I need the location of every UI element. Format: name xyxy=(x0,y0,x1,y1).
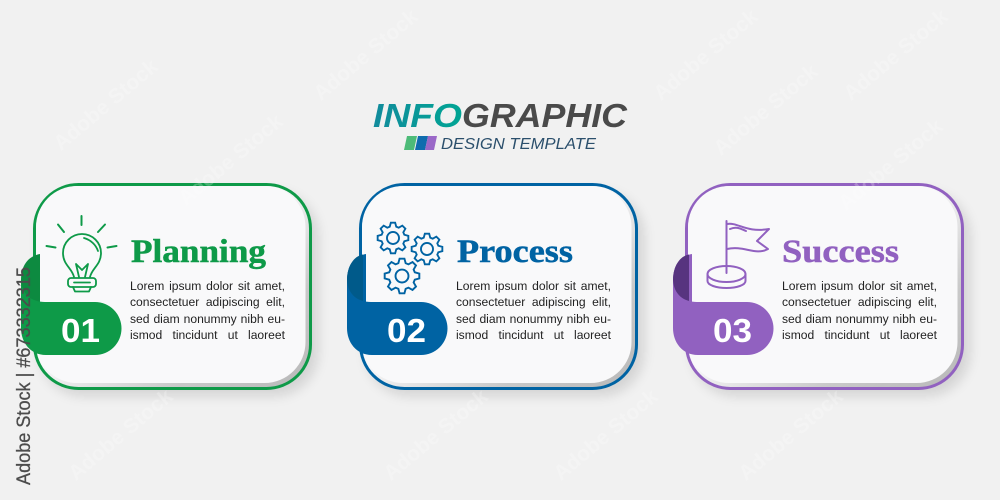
icon: three colored stripes xyxy=(404,136,437,150)
watermark pattern: Adobe Stock xyxy=(49,55,163,155)
watermark pattern: Adobe Stock xyxy=(839,5,953,105)
watermark pattern: Adobe Stock xyxy=(379,385,493,485)
heading: INFOGRAPHIC xyxy=(373,97,628,134)
icon: flag xyxy=(708,221,769,288)
watermark pattern: Adobe Stock xyxy=(734,385,848,485)
heading: INFOGRAPHIC: INFO xyxy=(373,97,462,134)
text: success description: consectetuer adipiscing elit, xyxy=(782,295,937,309)
text: success description: ismod tincidunt ut laoreet xyxy=(782,328,937,342)
watermark pattern: Adobe Stock xyxy=(64,385,178,485)
text: process description: sed diam nonummy nibh eu- xyxy=(456,312,611,326)
card frame xyxy=(360,184,644,396)
text: process description: Lorem ipsum dolor sit amet, xyxy=(456,279,611,293)
heading: success: Success xyxy=(782,234,899,270)
text: planning description: ismod tincidunt ut laoreet xyxy=(130,328,285,342)
text: planning description: sed diam nonummy nibh eu- xyxy=(130,312,285,326)
text: success description: Lorem ipsum dolor sit amet, xyxy=(782,279,937,293)
icon: light bulb xyxy=(46,216,116,292)
heading: INFOGRAPHIC: GRAPHIC xyxy=(462,97,628,134)
panel: success xyxy=(673,183,974,400)
text: planning description: consectetuer adipiscing elit, xyxy=(130,295,285,309)
number pill xyxy=(21,280,122,355)
number pill xyxy=(347,280,448,355)
text: success description xyxy=(782,279,937,342)
subheading: design template: DESIGN TEMPLATE xyxy=(441,136,597,153)
ribbon tab xyxy=(673,254,692,310)
number pill: 03 xyxy=(713,312,752,349)
icon: gears xyxy=(378,223,442,293)
watermark pattern: Adobe Stock xyxy=(174,110,288,210)
watermark pattern: Adobe Stock xyxy=(309,5,423,105)
heading: planning: Planning xyxy=(131,234,267,270)
title block xyxy=(373,97,628,153)
card frame xyxy=(34,184,318,396)
number pill: 02 xyxy=(387,312,426,349)
watermark pattern: Adobe Stock xyxy=(834,115,948,215)
ribbon tab xyxy=(21,254,40,310)
watermark pattern: Adobe Stock xyxy=(649,5,763,105)
text: process description xyxy=(456,279,611,342)
number pill: 01 xyxy=(61,312,100,349)
text: process description: consectetuer adipiscing elit, xyxy=(456,295,611,309)
text: planning description: Lorem ipsum dolor sit amet, xyxy=(130,279,285,293)
text: process description: ismod tincidunt ut laoreet xyxy=(456,328,611,342)
heading: process: Process xyxy=(457,234,573,270)
panel: planning xyxy=(21,183,322,400)
text: planning description xyxy=(130,279,285,342)
watermark pattern: Adobe Stock xyxy=(709,60,823,160)
text: success description: sed diam nonummy nibh eu- xyxy=(782,312,937,326)
ribbon tab xyxy=(347,254,366,310)
number pill xyxy=(673,280,774,355)
panel: process xyxy=(347,183,648,400)
watermark pattern: Adobe Stock xyxy=(549,385,663,485)
card frame xyxy=(686,184,970,396)
